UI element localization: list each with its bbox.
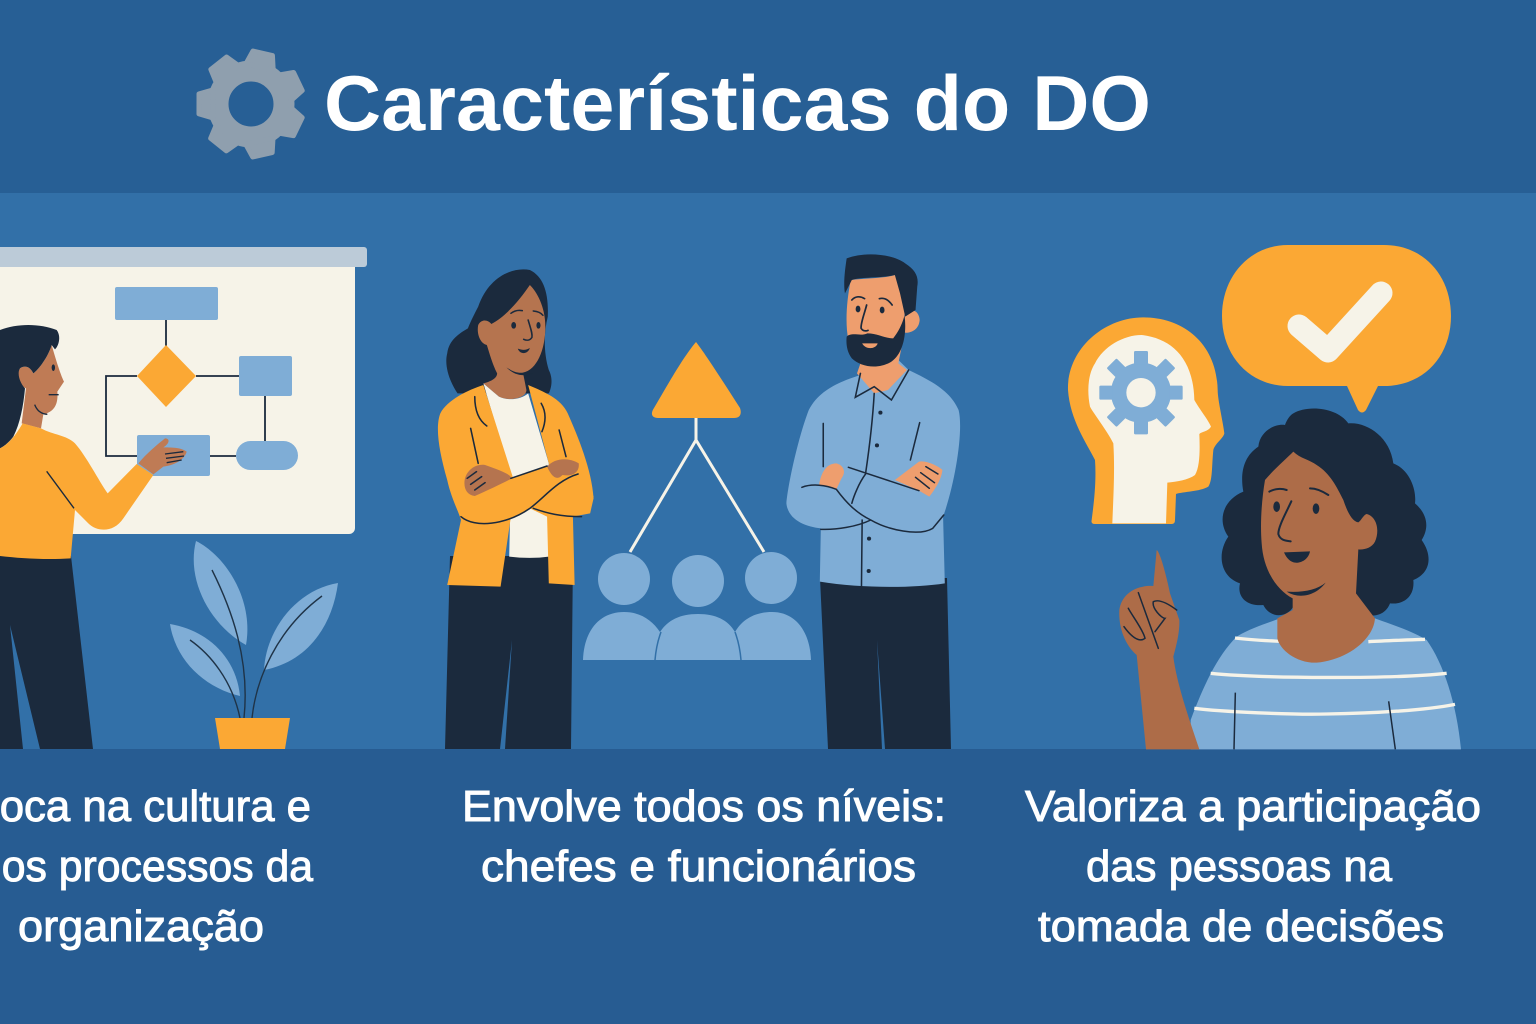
caption: culture and processes: organização: [18, 902, 264, 951]
woman with raised finger: [1119, 408, 1461, 749]
caption: participation: Valoriza a participação: [1025, 782, 1481, 831]
hierarchy diagram: [583, 342, 811, 660]
caption: participation: tomada de decisões: [1038, 902, 1444, 951]
icon: gear: [199, 50, 304, 158]
woman with blazer: [438, 269, 594, 749]
flowchart: [106, 287, 298, 476]
man in shirt: [786, 254, 960, 749]
whiteboard: [0, 247, 367, 534]
panel: participation illustration: [1068, 245, 1461, 749]
caption: all levels: chefes e funcionários: [481, 842, 916, 891]
caption: participation: [1025, 782, 1481, 951]
plant: [170, 541, 338, 749]
caption: participation: das pessoas na: [1086, 842, 1393, 891]
header band: [0, 0, 1536, 193]
caption: culture and processes: [0, 782, 314, 951]
footer band: [0, 749, 1536, 1024]
panel: all levels illustration: [438, 254, 960, 749]
icon: head with gear: [1068, 317, 1224, 524]
panel: culture and processes illustration: [0, 247, 367, 749]
title: Características do DO: [324, 59, 1151, 147]
presenter: [0, 325, 187, 749]
icon: speech bubble with check: [1222, 245, 1451, 412]
caption: all levels: Envolve todos os níveis:: [462, 782, 946, 831]
caption: all levels: [462, 782, 946, 891]
